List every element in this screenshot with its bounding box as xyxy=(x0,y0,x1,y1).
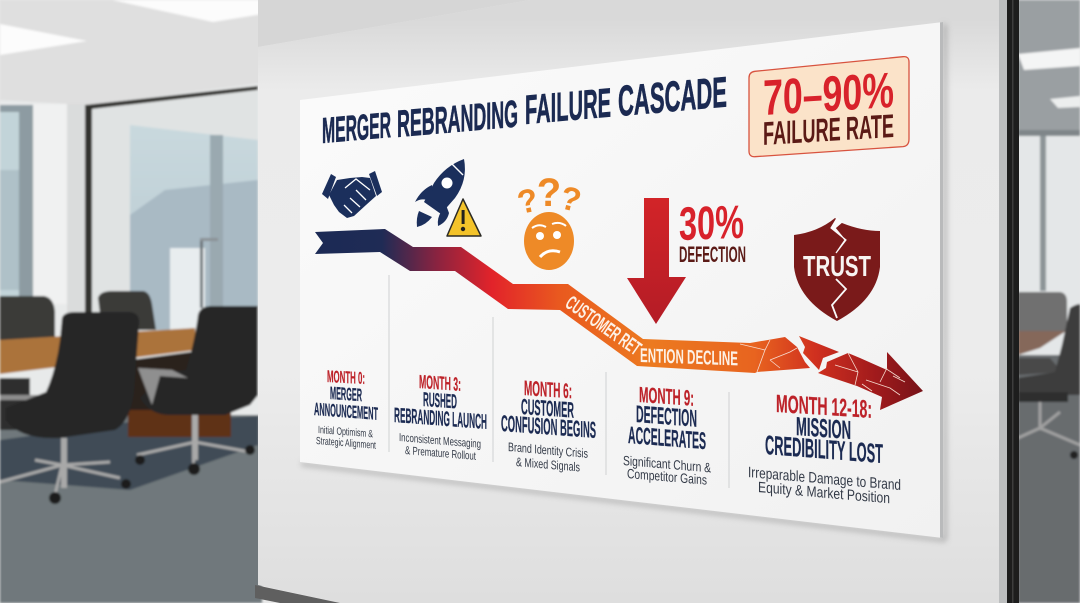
step: month 0: MERGER xyxy=(330,383,362,405)
timeline ribbon xyxy=(315,229,923,410)
icon: warning triangle xyxy=(447,199,481,236)
step: month 0 xyxy=(314,367,378,452)
timeline ribbon: ENTION DECLINE xyxy=(640,345,738,370)
wall: edge strip and door frame xyxy=(999,0,1019,603)
step: month 12-18: Equity & Market Position xyxy=(758,479,890,507)
callout: 70–90% failure rate: FAILURE RATE xyxy=(763,107,894,152)
poster: infographic panel xyxy=(300,22,943,538)
stat: 30% defection xyxy=(679,195,746,267)
step: month 6: CUSTOMER xyxy=(521,394,574,423)
arrow: defection drop xyxy=(627,198,686,324)
title xyxy=(322,69,727,151)
step: month 9: Significant Churn & xyxy=(623,453,711,475)
background: office room on the left xyxy=(0,0,345,603)
poster: infographic panel: ACCELERATES xyxy=(628,422,706,455)
step: month 3: & Premature Rollout xyxy=(405,445,477,463)
wall: ceiling above partition xyxy=(258,0,1005,47)
step: month 6: Brand Identity Crisis xyxy=(508,440,588,461)
icon: cracked trust shield xyxy=(794,218,880,321)
step: month 12-18: MISSION xyxy=(796,411,851,445)
step: month 3: Inconsistent Messaging xyxy=(399,432,481,451)
title: FAILURE xyxy=(525,80,611,133)
step: month 12-18: CREDIBILITY LOST xyxy=(765,430,883,469)
column dividers xyxy=(389,275,729,488)
icon: confused face with question marks: ? xyxy=(514,181,541,221)
icon: confused face with question marks: ? xyxy=(557,178,585,219)
step: month 9 xyxy=(623,382,711,488)
wall: white partition xyxy=(258,0,1005,603)
step: month 12-18 xyxy=(748,390,901,507)
icon: confused face with question marks xyxy=(514,171,585,270)
poster: infographic panel: ANNOUNCEMENT xyxy=(314,399,378,424)
step: month 0: Initial Optimism & xyxy=(318,424,373,440)
title: CASCADE xyxy=(618,69,727,126)
callout: 70–90% failure rate xyxy=(749,57,909,157)
icon: confused face with question marks: ? xyxy=(537,171,561,215)
title: REBRANDING xyxy=(397,93,518,146)
step: month 6: MONTH 6: xyxy=(524,377,572,403)
background: office room on the right xyxy=(1018,0,1080,603)
step: month 3: MONTH 3: xyxy=(419,372,461,396)
step: month 0: MONTH 0: xyxy=(327,367,365,388)
step: month 12-18: Irreparable Damage to Brand xyxy=(748,464,901,494)
poster shadow xyxy=(300,22,947,542)
step: month 3 xyxy=(394,372,487,463)
poster: infographic panel: CONFUSION BEGINS xyxy=(501,410,596,443)
step: month 3: RUSHED xyxy=(423,389,457,413)
step: month 6 xyxy=(501,377,596,474)
callout: 70–90% failure rate: 70–90% xyxy=(763,62,894,126)
icon: cracked trust shield: TRUST xyxy=(803,251,871,283)
timeline ribbon: CUSTOMER RET xyxy=(561,292,645,360)
step: month 6: & Mixed Signals xyxy=(516,455,580,474)
step: month 9: MONTH 9: xyxy=(639,382,694,411)
stat: 30% defection: DEFECTION xyxy=(679,242,746,267)
wall: skirting board xyxy=(255,585,340,603)
step: month 9: DEFECTION xyxy=(636,401,697,433)
icon: rocket with warning sign xyxy=(415,159,481,236)
poster: infographic panel: REBRANDING LAUNCH xyxy=(394,404,487,434)
step: month 0: Strategic Alignment xyxy=(316,435,376,452)
step: month 12-18: MONTH 12-18: xyxy=(776,390,872,424)
step: month 9: Competitor Gains xyxy=(627,466,707,488)
title: MERGER xyxy=(322,104,391,151)
icon: handshake xyxy=(322,171,382,218)
stat: 30% defection: 30% xyxy=(679,195,744,250)
